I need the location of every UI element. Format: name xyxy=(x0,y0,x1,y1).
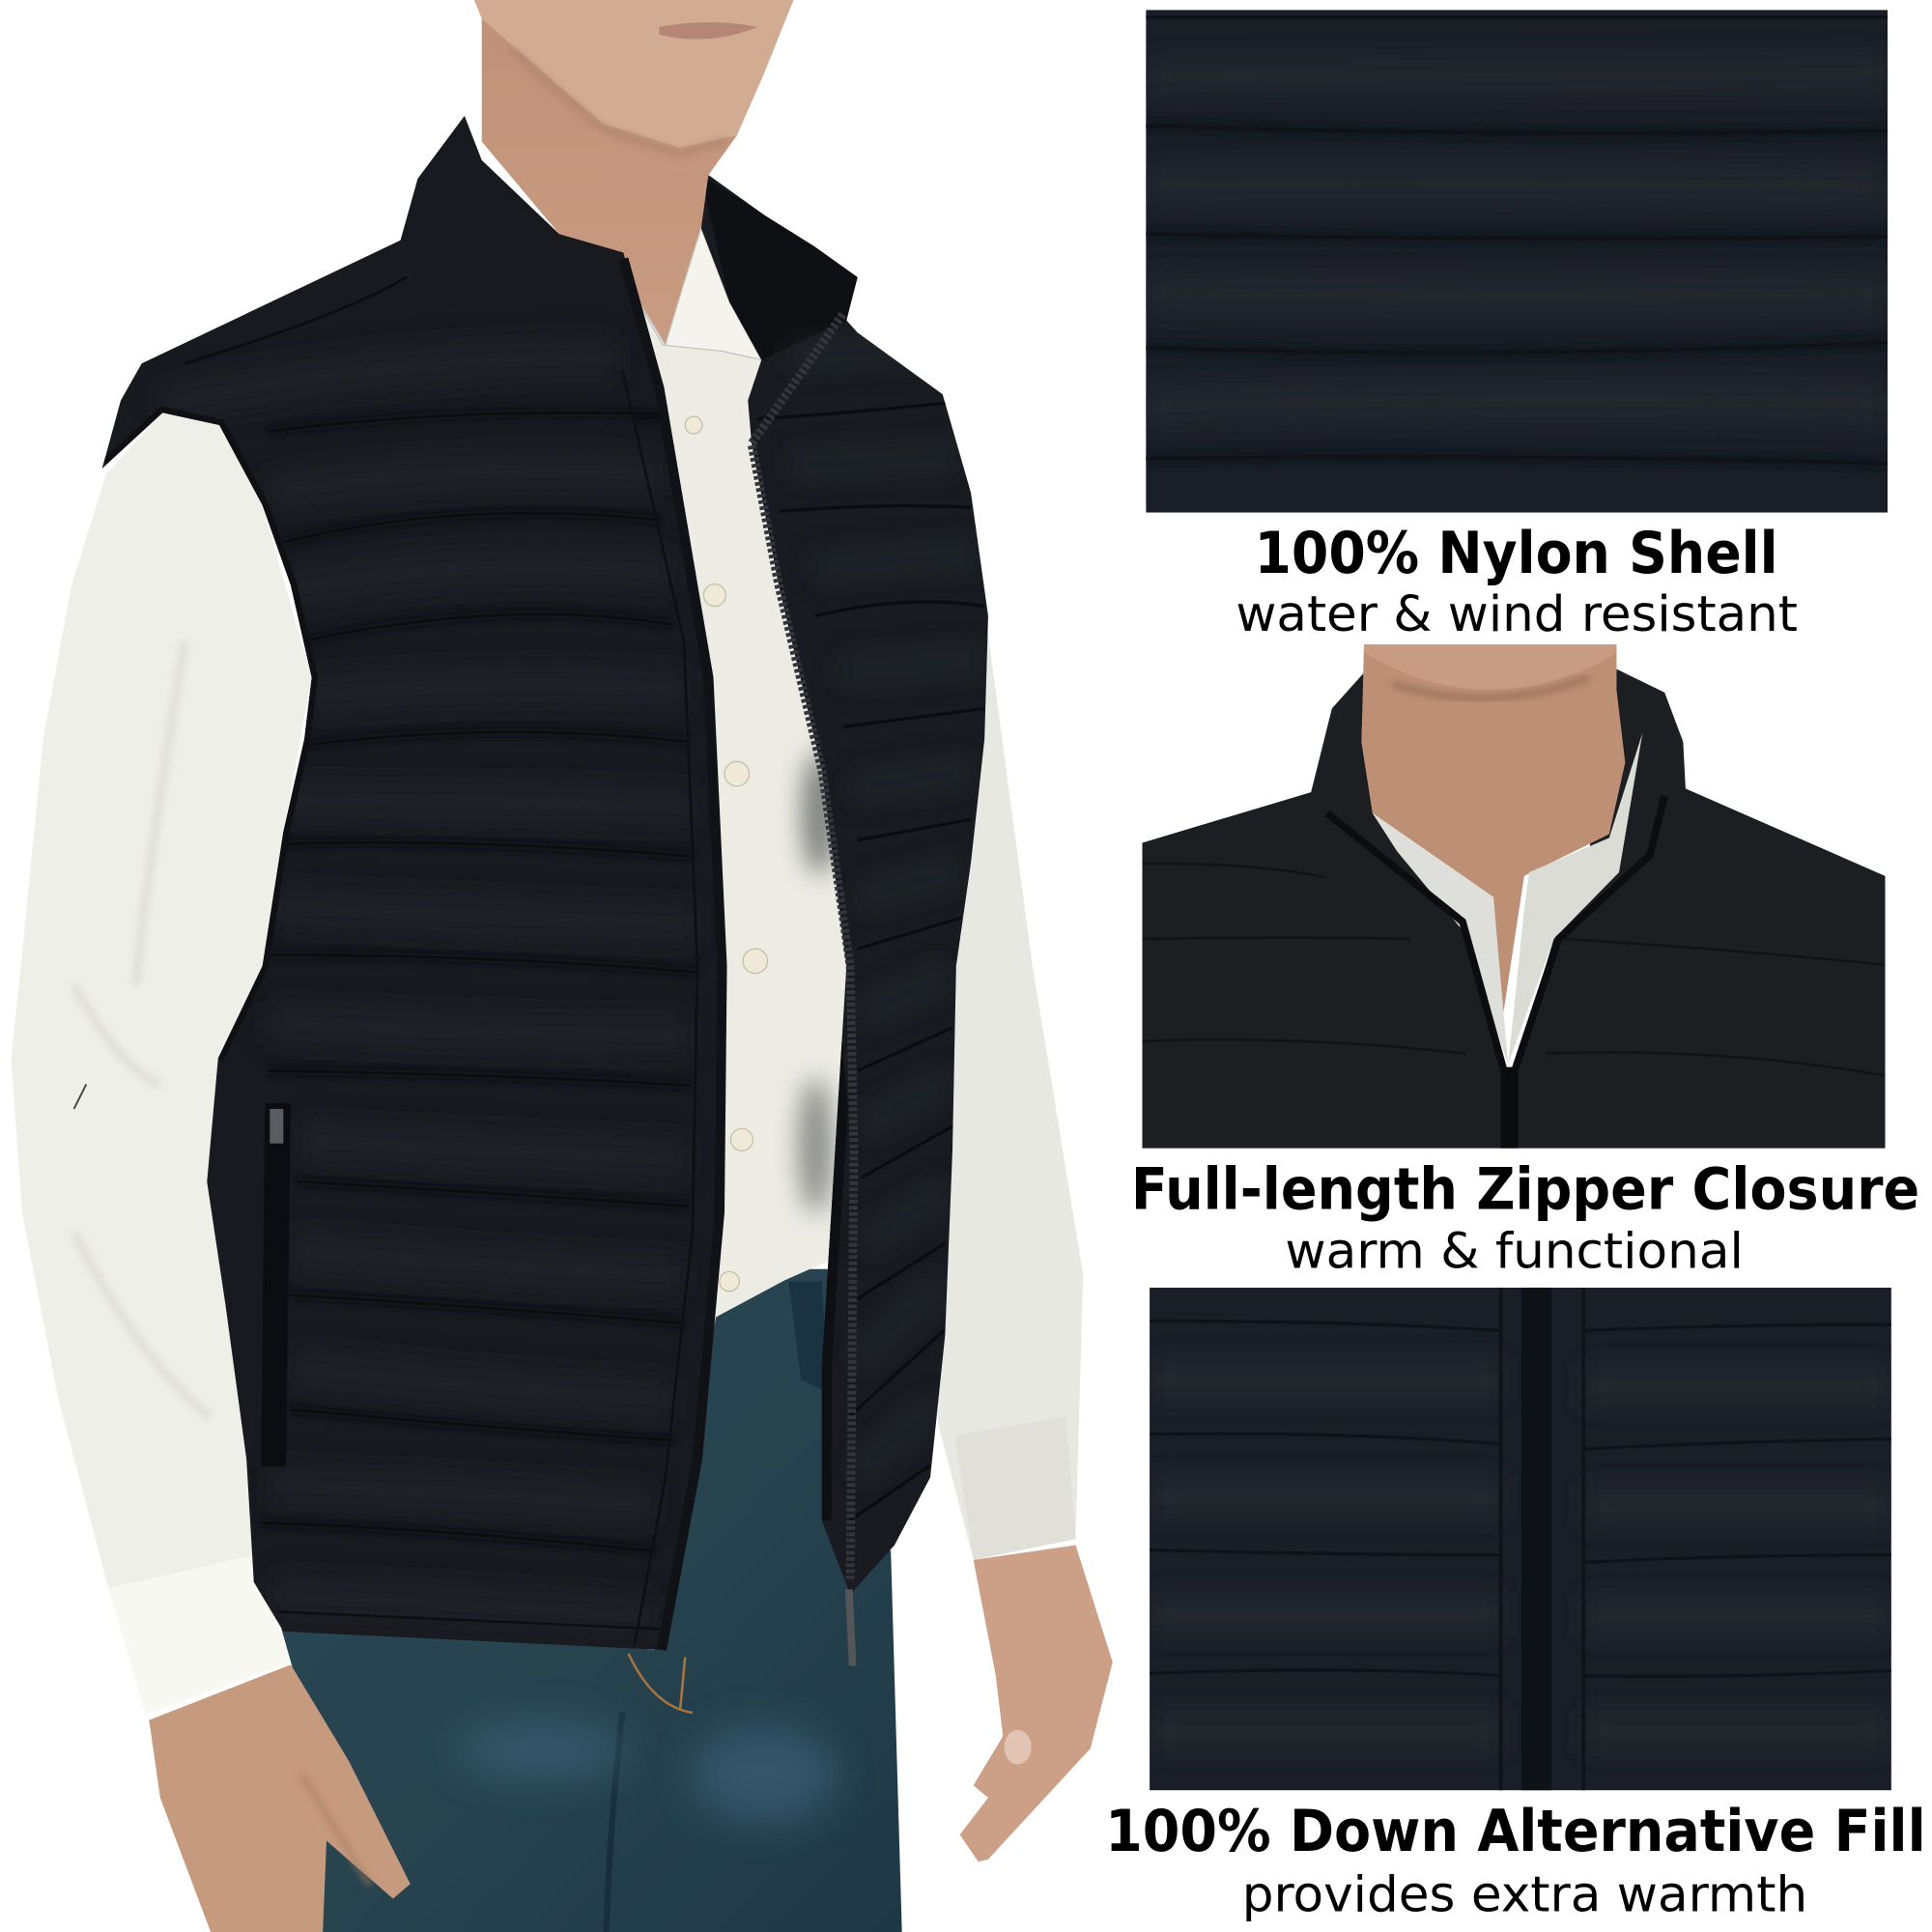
shirt buttons xyxy=(685,416,768,1292)
shirt collar right xyxy=(1508,733,1642,1065)
vest right front xyxy=(690,160,998,1602)
panel: zipper collar detail xyxy=(1142,644,1886,1149)
zipper pull xyxy=(845,1589,856,1665)
subheading: zipper: warm & functional xyxy=(1285,1223,1744,1280)
right hand xyxy=(960,1545,1113,1861)
vest in panel xyxy=(1142,669,1886,1149)
left sleeve xyxy=(11,412,312,1714)
shirt collar xyxy=(639,228,761,359)
heading: nylon shell: 100% Nylon Shell xyxy=(1254,520,1778,587)
neck and lower face xyxy=(474,0,793,345)
panel: down alternative fill detail xyxy=(1150,1288,1891,1790)
photo: man wearing the vest xyxy=(11,0,1113,1932)
shirt front xyxy=(639,301,850,1318)
quilting seams xyxy=(1142,864,1886,1076)
center zipper xyxy=(1521,1288,1551,1790)
subheading: fill: provides extra warmth xyxy=(1242,1866,1807,1923)
shirt collar left xyxy=(1373,813,1508,1065)
neck xyxy=(1361,644,1625,1014)
left zipper xyxy=(623,259,722,1650)
jeans xyxy=(277,1269,902,1932)
subheading: nylon shell: water & wind resistant xyxy=(1236,586,1798,643)
right sleeve xyxy=(938,635,1083,1560)
panel: nylon shell detail xyxy=(1146,10,1888,513)
zipper pull xyxy=(1501,1067,1518,1149)
zippers xyxy=(1327,796,1664,1068)
right zipper xyxy=(752,314,854,1582)
side pocket zipper xyxy=(261,1103,291,1466)
vest left front xyxy=(86,111,739,1663)
left hand xyxy=(149,1664,411,1932)
